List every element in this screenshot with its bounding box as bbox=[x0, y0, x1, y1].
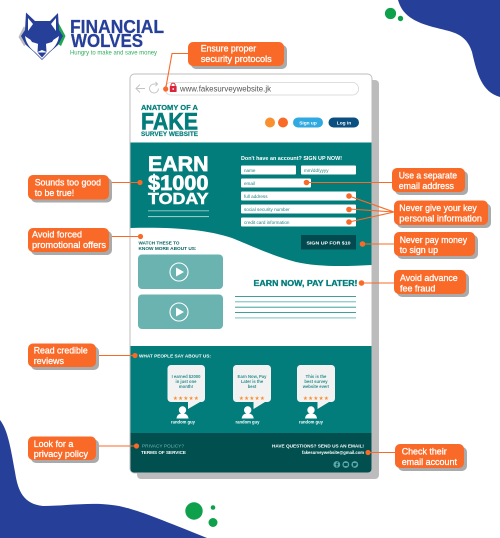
review: first bbox=[168, 365, 205, 424]
signup form bbox=[241, 156, 356, 226]
callout: never pay money to sign up bbox=[360, 232, 478, 259]
site title: FAKE bbox=[141, 108, 198, 136]
logo wordmark: FINANCIAL bbox=[70, 17, 164, 37]
review: second: random guy bbox=[236, 420, 260, 424]
watch heading: WATCH THESE TO bbox=[138, 240, 180, 246]
logo tagline: Hungry to make and save money bbox=[70, 50, 157, 56]
review: third bbox=[297, 365, 335, 424]
callout: sounds too good to be true: Sounds too good bbox=[35, 178, 101, 188]
callout: ensure proper security protocols bbox=[163, 42, 287, 92]
header dots bbox=[265, 118, 288, 128]
callout: use a separate email address: email address bbox=[399, 181, 454, 192]
icon: red padlock bbox=[170, 83, 177, 92]
callout: ensure proper security protocols: Ensure proper bbox=[201, 44, 257, 54]
review: first: ★★★★★ bbox=[173, 396, 199, 402]
reviews panel bbox=[130, 346, 372, 433]
review: third: website ever! bbox=[302, 384, 329, 389]
field: full address: full address bbox=[244, 194, 268, 199]
callout: read credible reviews bbox=[28, 344, 138, 370]
callout: look for a privacy policy: privacy policy bbox=[34, 449, 88, 460]
callout: never pay money to sign up: to sign up bbox=[400, 245, 438, 256]
hero panel bbox=[130, 142, 372, 266]
callout: look for a privacy policy bbox=[28, 436, 139, 463]
review: first: in just one bbox=[176, 379, 197, 384]
review: first: month! bbox=[179, 384, 193, 389]
video: second bbox=[138, 294, 223, 329]
url: www.fakesurveywebsite.jk bbox=[179, 84, 271, 94]
icon: back arrow bbox=[136, 84, 145, 92]
icon: reload bbox=[150, 82, 158, 93]
browser window bbox=[130, 74, 372, 473]
callout: never give your key personal information: Never give your key bbox=[399, 203, 477, 214]
watch heading: KNOW MORE ABOUT US: bbox=[138, 246, 197, 251]
field: email: email bbox=[244, 181, 255, 186]
review: second: ★★★★★ bbox=[239, 396, 265, 402]
review: third: random guy bbox=[299, 420, 324, 424]
footer panel: PRIVACY POLICY? bbox=[142, 444, 184, 448]
green dots: top bbox=[385, 8, 403, 21]
sign up pill: Sign up bbox=[299, 120, 317, 126]
placeholder text lines bbox=[235, 296, 356, 318]
field: date: mm/dd/yyyy bbox=[304, 168, 329, 173]
decorative blob: top right bbox=[398, 0, 500, 97]
address bar bbox=[165, 82, 358, 95]
callout: check their email account: email account bbox=[402, 457, 457, 468]
signup button: SIGN UP FOR $10 bbox=[306, 240, 351, 246]
review: second: Later is the bbox=[241, 379, 264, 384]
review: third: This is the bbox=[306, 374, 327, 379]
callout: look for a privacy policy: Look for a bbox=[34, 439, 74, 450]
callout: sounds too good to be true: to be true! bbox=[35, 188, 74, 199]
site title: ANATOMY OF A bbox=[141, 105, 198, 112]
browser window shadow bbox=[137, 80, 379, 479]
logo: Financial Wolves bbox=[18, 12, 164, 60]
log in pill: Log in bbox=[337, 120, 351, 126]
review: third: best survey bbox=[304, 379, 328, 384]
callout: check their email account: Check their bbox=[402, 446, 447, 458]
hero headline: EARN bbox=[148, 153, 208, 176]
reviews panel: WHAT PEOPLE SAY ABOUT US: bbox=[139, 354, 211, 358]
earn now heading: EARN NOW, PAY LATER! bbox=[254, 279, 358, 288]
footer panel: TERMS OF SERVICE bbox=[141, 450, 186, 455]
callout: avoid forced promotional offers: Avoid forced bbox=[32, 230, 82, 240]
callout: read credible reviews: reviews bbox=[34, 356, 64, 367]
hero headline: $1000 bbox=[148, 172, 208, 195]
review: first: random guy bbox=[171, 420, 196, 424]
signup form: Don't have an account? SIGN UP NOW! bbox=[241, 156, 342, 162]
callout: read credible reviews: Read credible bbox=[34, 346, 88, 356]
callout: never give your key personal information: personal information bbox=[399, 214, 482, 224]
footer panel: fakesurveywebsite@gmail.com bbox=[302, 450, 364, 455]
callout: use a separate email address bbox=[304, 168, 468, 195]
callout: avoid advance fee fraud: fee fraud bbox=[400, 284, 435, 294]
callout: check their email account bbox=[365, 444, 467, 471]
callout: avoid advance fee fraud: Avoid advance bbox=[400, 273, 458, 284]
footer panel: HAVE QUESTIONS? SEND US AN EMAIL! bbox=[272, 444, 364, 448]
review: second: Earn Now, Pay bbox=[238, 374, 267, 379]
field: name: name bbox=[244, 168, 256, 173]
review: second bbox=[233, 365, 271, 424]
callout: never pay money to sign up: Never pay money bbox=[400, 235, 467, 246]
field: social security number: social security number bbox=[244, 207, 290, 212]
review: first: I earned $2000 bbox=[172, 374, 201, 379]
callout: ensure proper security protocols: security protocols bbox=[201, 54, 272, 65]
callout: avoid forced promotional offers: promotional offers bbox=[32, 240, 106, 251]
icon: wolf head bbox=[18, 12, 66, 60]
site title: SURVEY WEBSITE bbox=[141, 131, 198, 138]
footer panel bbox=[130, 433, 372, 472]
callout: never give your key personal information bbox=[346, 193, 491, 228]
signup button bbox=[301, 235, 356, 250]
video: first bbox=[138, 254, 223, 289]
hero headline: TODAY bbox=[148, 191, 209, 208]
review: third: ★★★★★ bbox=[303, 396, 329, 402]
green dots: bottom bbox=[185, 502, 218, 527]
log in pill bbox=[328, 118, 359, 128]
watch heading bbox=[138, 240, 197, 251]
callout: avoid advance fee fraud bbox=[359, 270, 469, 297]
callout: use a separate email address: Use a separate bbox=[399, 170, 457, 182]
sign up pill bbox=[293, 118, 323, 128]
logo: Financial Wolves: WOLVES bbox=[71, 31, 143, 51]
decorative blob: bottom left bbox=[0, 420, 207, 538]
field: credit card information: credit card information bbox=[244, 220, 290, 225]
callout: sounds too good to be true bbox=[28, 175, 143, 202]
hero headline bbox=[148, 153, 209, 208]
social icons bbox=[333, 461, 358, 468]
browser controls bbox=[136, 82, 358, 95]
review: second: best bbox=[248, 384, 257, 389]
callout: avoid forced promotional offers bbox=[28, 228, 143, 255]
